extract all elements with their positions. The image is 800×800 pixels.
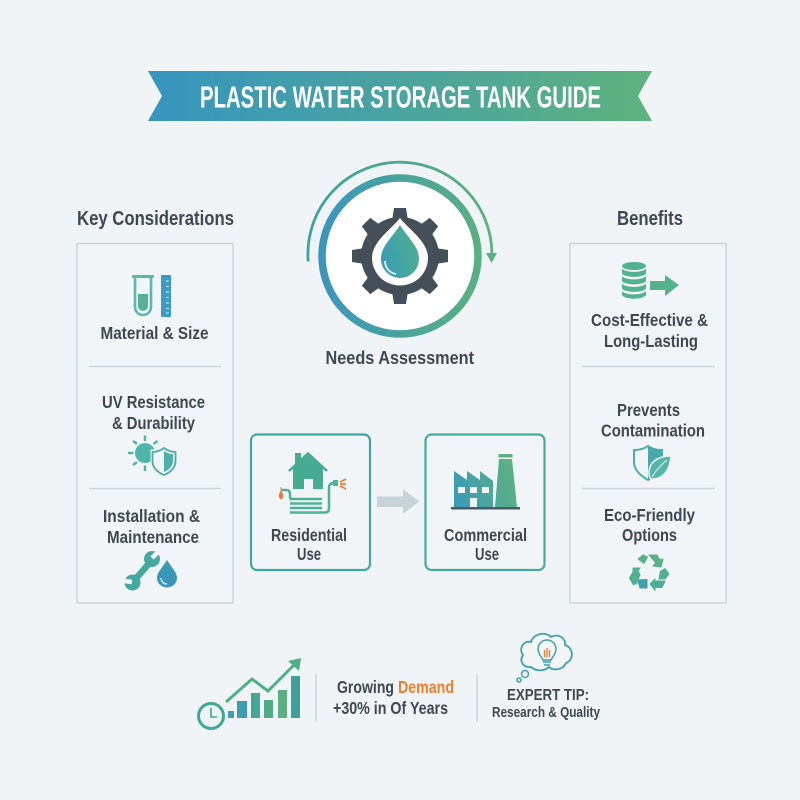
label: eco-friendly options: Options <box>622 525 677 545</box>
label: commercial use: Use <box>475 544 499 564</box>
card: residential use <box>251 434 370 570</box>
label: UV resistance and durability: & Durability <box>112 413 195 433</box>
label: installation and maintenance: Maintenance <box>107 527 199 547</box>
icon: house and hose <box>279 453 346 512</box>
icon: sun and shield <box>128 436 176 476</box>
label: prevents contamination <box>601 400 705 440</box>
arrow: residential to commercial <box>377 489 419 514</box>
text: growing demand: +30% in Of Years <box>333 698 448 718</box>
icon: thought cloud with light bulb <box>517 634 572 682</box>
icon: shield and leaf <box>634 446 671 480</box>
text: expert tip <box>492 687 601 721</box>
label: commercial use: Commercial <box>444 525 527 545</box>
text: growing demand <box>333 677 454 718</box>
icon: test tube and ruler <box>132 275 171 317</box>
panel: key considerations <box>77 244 233 603</box>
needs assessment emblem <box>308 162 497 368</box>
label: needs assessment: Needs Assessment <box>326 347 474 368</box>
label: residential use <box>271 525 347 564</box>
label: installation and maintenance <box>103 506 200 547</box>
label: UV resistance and durability <box>102 392 205 433</box>
text: growing demand: Demand <box>398 677 454 697</box>
label: residential use: Use <box>297 544 321 564</box>
label: prevents contamination: Contamination <box>601 420 705 440</box>
text: expert tip: Research & Quality <box>492 704 601 721</box>
heading: key considerations: Key Considerations <box>77 207 234 230</box>
panel: benefits <box>570 244 726 603</box>
icon: factory <box>451 454 520 510</box>
label: material and size: Material & Size <box>100 323 209 343</box>
icon: clock <box>198 704 224 728</box>
icon: stacked cylinder and arrow <box>622 262 679 299</box>
label: prevents contamination: Prevents <box>617 400 680 420</box>
label: cost-effective and long-lasting: Long-Lasting <box>604 331 698 351</box>
text: growing demand: Growing <box>337 677 394 697</box>
label: installation and maintenance: Installation & <box>103 506 200 526</box>
icon: recycling symbol <box>630 555 669 590</box>
arrow: outer circular arc <box>308 162 497 263</box>
label: cost-effective and long-lasting: Cost-Effective & <box>591 310 708 330</box>
growth chart with clock <box>198 658 301 728</box>
title banner <box>148 71 652 121</box>
arrow: trend line <box>226 658 301 702</box>
icon: gear with water drop <box>352 208 448 304</box>
heading: benefits: Benefits <box>617 207 683 230</box>
label: commercial use <box>444 525 527 564</box>
icon: wrench and water drop <box>124 551 177 590</box>
text: expert tip: EXPERT TIP: <box>507 687 589 704</box>
divider <box>315 674 317 722</box>
card: commercial use <box>426 434 544 570</box>
label: cost-effective and long-lasting <box>591 310 708 351</box>
label: UV resistance and durability: UV Resistance <box>102 392 205 412</box>
title: PLASTIC WATER STORAGE TANK GUIDE <box>200 80 601 114</box>
divider <box>476 674 478 722</box>
label: eco-friendly options <box>604 505 695 545</box>
label: eco-friendly options: Eco-Friendly <box>604 505 695 525</box>
ring <box>322 178 478 334</box>
label: residential use: Residential <box>271 525 347 545</box>
